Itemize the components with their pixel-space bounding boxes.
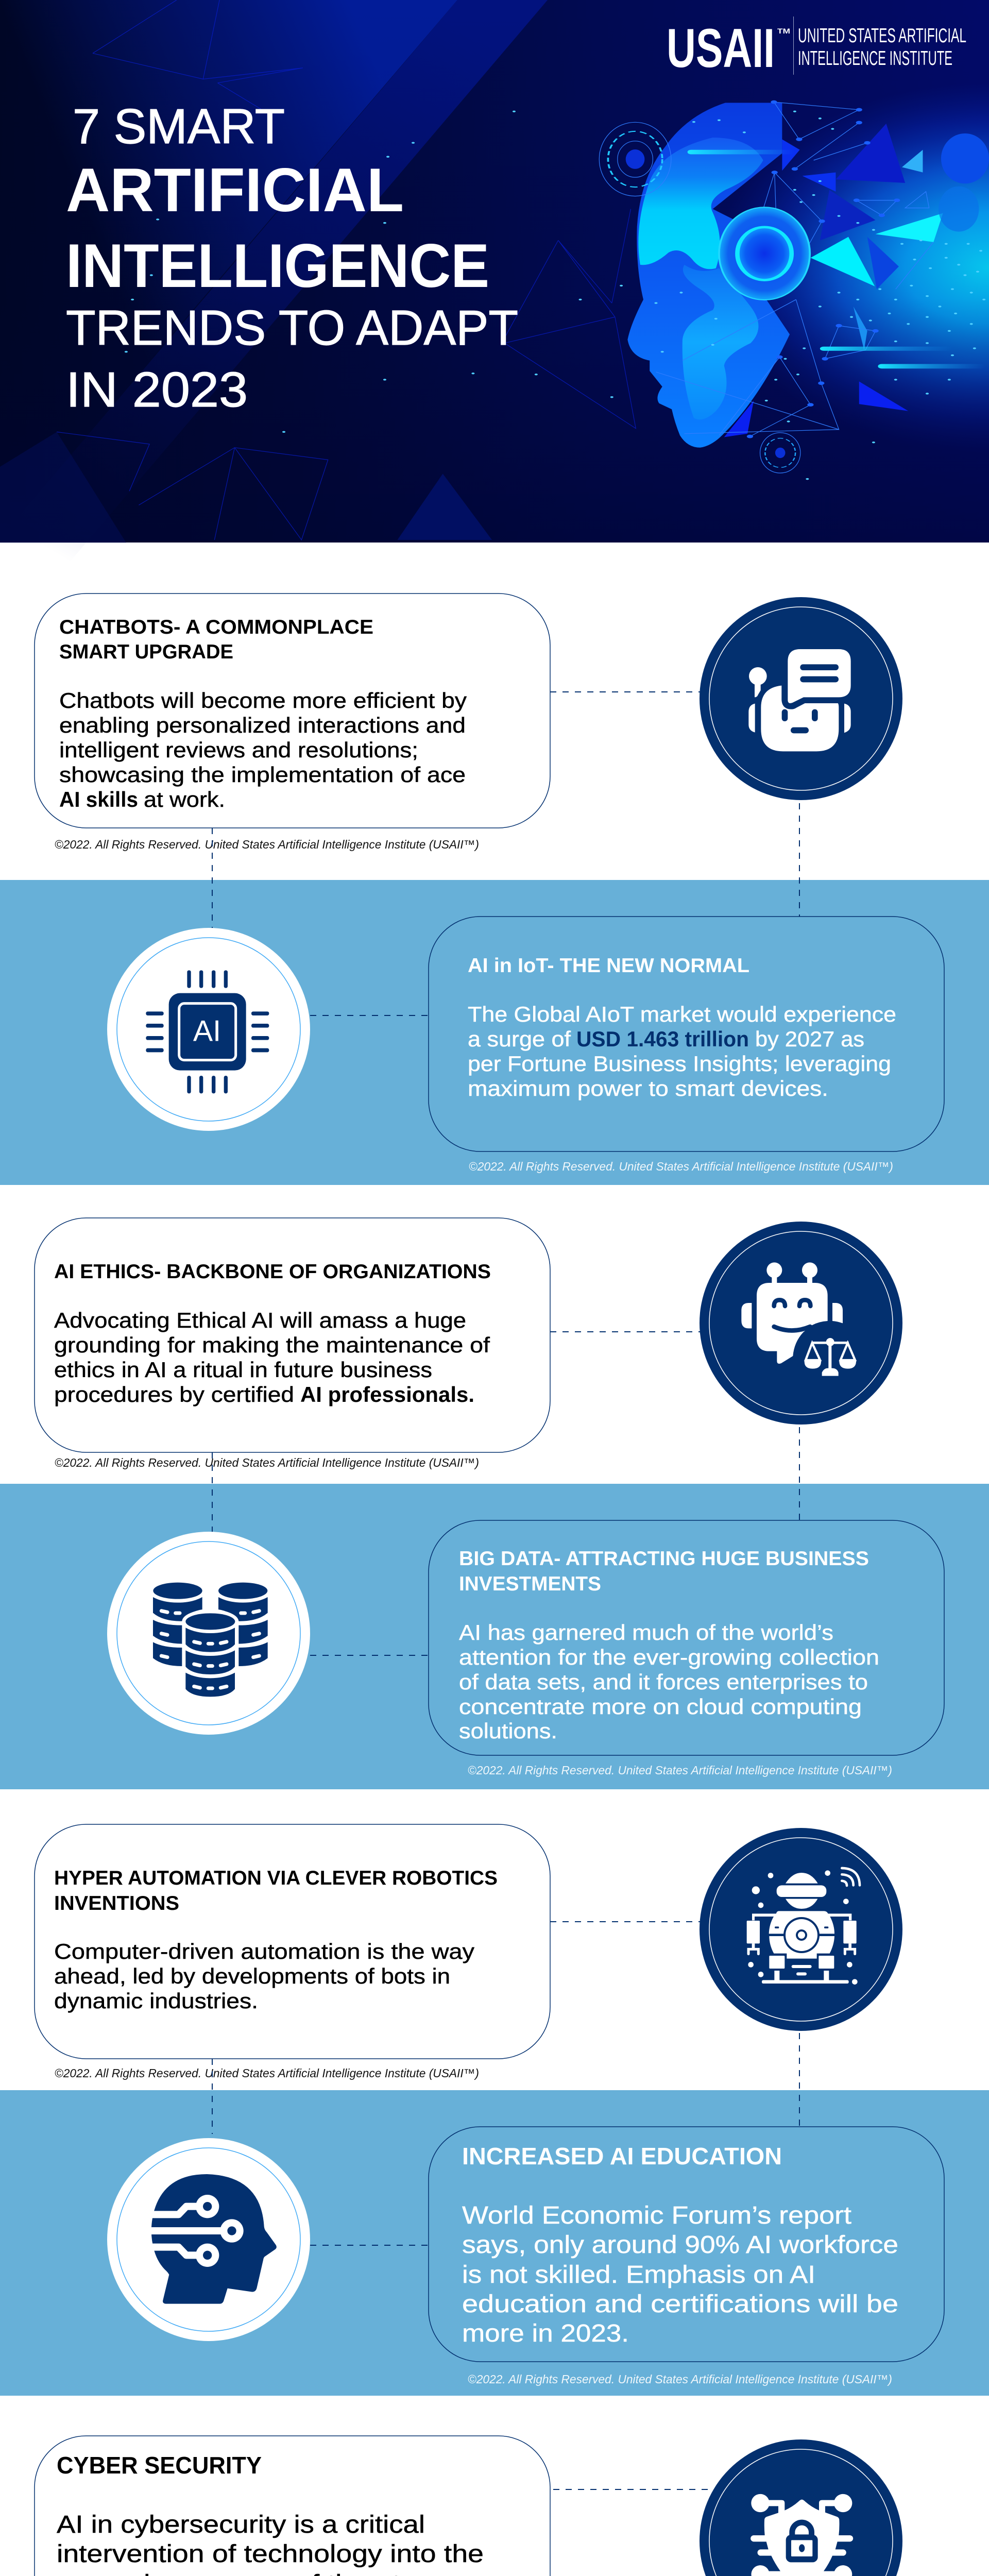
logo: USAII: TM [777,27,790,35]
logo: USAII: USAII [667,17,775,79]
text: AI in IoT body: maximum power to smart devices. [468,1076,828,1100]
text: big data body: of data sets, and it forces enterprises to [459,1670,868,1694]
icon: databases [107,1532,310,1735]
text: AI ethics body [54,1308,490,1406]
arrow: connector card 5 to head icon [212,2059,213,2134]
panel: hyper automation card [35,1824,550,2080]
arrow: connector database icon to card 4 [310,1655,429,1656]
text: AI ethics body: grounding for making the maintenance of [54,1333,490,1357]
title: ARTIFICIAL [66,156,404,225]
text: AI education body: says, only around 90% AI workforce [462,2231,898,2259]
copyright: ©2022. All Rights Reserved. United States Artificial Intelligence Institute (USAII™) [468,1764,892,1777]
text: AI ethics body: ethics in AI a ritual in future business [54,1358,432,1382]
copyright: ©2022. All Rights Reserved. United States Artificial Intelligence Institute (USAII™) [55,1456,479,1469]
arrow: connector icon to card 2 [799,803,800,917]
text: chatbots body: Chatbots will become more efficient by [59,688,467,713]
arrow: connector card 7 to icon [553,2489,710,2490]
panel: cyber security card [35,2436,550,2576]
copyright: ©2022. All Rights Reserved. United States Artificial Intelligence Institute (USAII™) [468,2372,892,2386]
text: cyber security body [57,2511,509,2576]
heading: cyber security: CYBER SECURITY [57,2452,262,2479]
heading: hyper automation [54,1867,498,1914]
title: 7 SMART [73,99,285,154]
text: AI in IoT body: USD 1.463 trillion [576,1027,749,1051]
panel: AI ethics card [35,1218,550,1469]
icon: AI chip: AI [193,1015,221,1048]
text: chatbots body: AI skills [59,787,138,811]
text: AI education body [462,2202,898,2347]
arrow: connector card 3 to icon [550,1331,701,1332]
title: INTELLIGENCE [66,231,489,300]
heading: AI education: INCREASED AI EDUCATION [462,2143,782,2170]
panel: hero banner [0,0,989,644]
text: hyper automation body [54,1939,474,2013]
arrow: connector icon to card 4 [799,1427,800,1520]
icon: ethics robot [700,1222,902,1425]
text: AI in IoT body [468,1002,896,1100]
text: chatbots body: enabling personalized interactions and [59,713,466,737]
arrow: connector card 5 to icon [550,1921,701,1922]
text: AI education body: education and certifications will be [462,2291,898,2318]
panel: chatbots card [35,594,550,851]
text: AI in IoT body: The Global AIoT market would experience [468,1002,896,1026]
heading: AI ethics: AI ETHICS- BACKBONE OF ORGANIZATIONS [54,1261,491,1283]
artwork: AI face [0,0,989,543]
text: hyper automation body: ahead, led by developments of bots in [54,1964,450,1988]
text: cyber security body: AI in cybersecurity is a critical [57,2511,425,2538]
panel: blue band 2 [0,1484,989,1789]
arrow: connector icon to card 6 [799,2033,800,2127]
text: AI in IoT body: per Fortune Business Insights; leveraging [468,1052,891,1076]
text: hyper automation body: dynamic industries. [54,1989,258,2013]
heading: big data: INVESTMENTS [459,1573,601,1595]
icon: security shield [700,2439,902,2576]
arrow: connector card 1 to chip icon [212,828,213,928]
title: IN 2023 [66,362,248,417]
panel: blue band 1 [0,880,989,1185]
title [66,99,518,417]
copyright: ©2022. All Rights Reserved. United States Artificial Intelligence Institute (USAII™) [55,838,479,851]
icon: AI head [107,2138,310,2341]
text: AI in IoT body: a surge of [468,1027,571,1051]
text: chatbots body: intelligent reviews and resolutions; [59,738,418,762]
copyright: ©2022. All Rights Reserved. United States Artificial Intelligence Institute (USAII™) [55,2066,479,2080]
text: cyber security body: intervention of technology into the [57,2540,484,2568]
text: AI ethics body: procedures by certified [54,1382,294,1406]
panel: blue band 3 [0,2090,989,2396]
text: big data body: attention for the ever-growing collection [459,1645,879,1669]
heading: chatbots: SMART UPGRADE [59,641,233,663]
icon: AI chip [107,928,310,1131]
text: AI education body: is not skilled. Emphasis on AI [462,2261,815,2289]
text: hyper automation body: Computer-driven automation is the way [54,1939,474,1963]
heading: big data: BIG DATA- ATTRACTING HUGE BUSINESS [459,1548,869,1570]
icon: chatbot [700,597,902,800]
heading: hyper automation: HYPER AUTOMATION VIA CLEVER ROBOTICS [54,1867,498,1889]
text: chatbots body [59,688,467,811]
arrow: connector card 1 to icon [550,691,701,692]
heading: chatbots [59,616,373,663]
arrow: connector card 3 to database icon [212,1452,213,1532]
heading: hyper automation: INVENTIONS [54,1892,179,1914]
title: TRENDS TO ADAPT [66,300,518,355]
text: AI in IoT body: by 2027 as [755,1027,864,1051]
text: AI education body: more in 2023. [462,2320,629,2347]
heading: AI in IoT: AI in IoT- THE NEW NORMAL [468,955,749,977]
arrow: connector head icon to card 6 [310,2245,429,2246]
text: chatbots body: at work. [144,787,225,811]
arrow: connector chip icon to card 2 [310,1015,429,1016]
text: AI ethics body: Advocating Ethical AI will amass a huge [54,1308,466,1332]
panel: AI in IoT card [429,917,944,1173]
heading: chatbots: CHATBOTS- A COMMONPLACE [59,616,373,638]
text: big data body: AI has garnered much of the world’s [459,1620,833,1645]
heading: big data [459,1548,869,1595]
text: AI education body: World Economic Forum’s report [462,2202,851,2229]
text: chatbots body: showcasing the implementation of ace [59,762,466,787]
text: big data body: solutions. [459,1719,557,1743]
text: big data body [459,1620,879,1743]
text: big data body: concentrate more on cloud computing [459,1694,862,1719]
logo: USAII [667,16,966,79]
copyright: ©2022. All Rights Reserved. United States Artificial Intelligence Institute (USAII™) [469,1160,893,1173]
icon: robot [700,1828,902,2031]
panel: AI education card [429,2127,944,2386]
panel: big data card [429,1520,944,1777]
text: AI ethics body: AI professionals. [300,1382,474,1406]
